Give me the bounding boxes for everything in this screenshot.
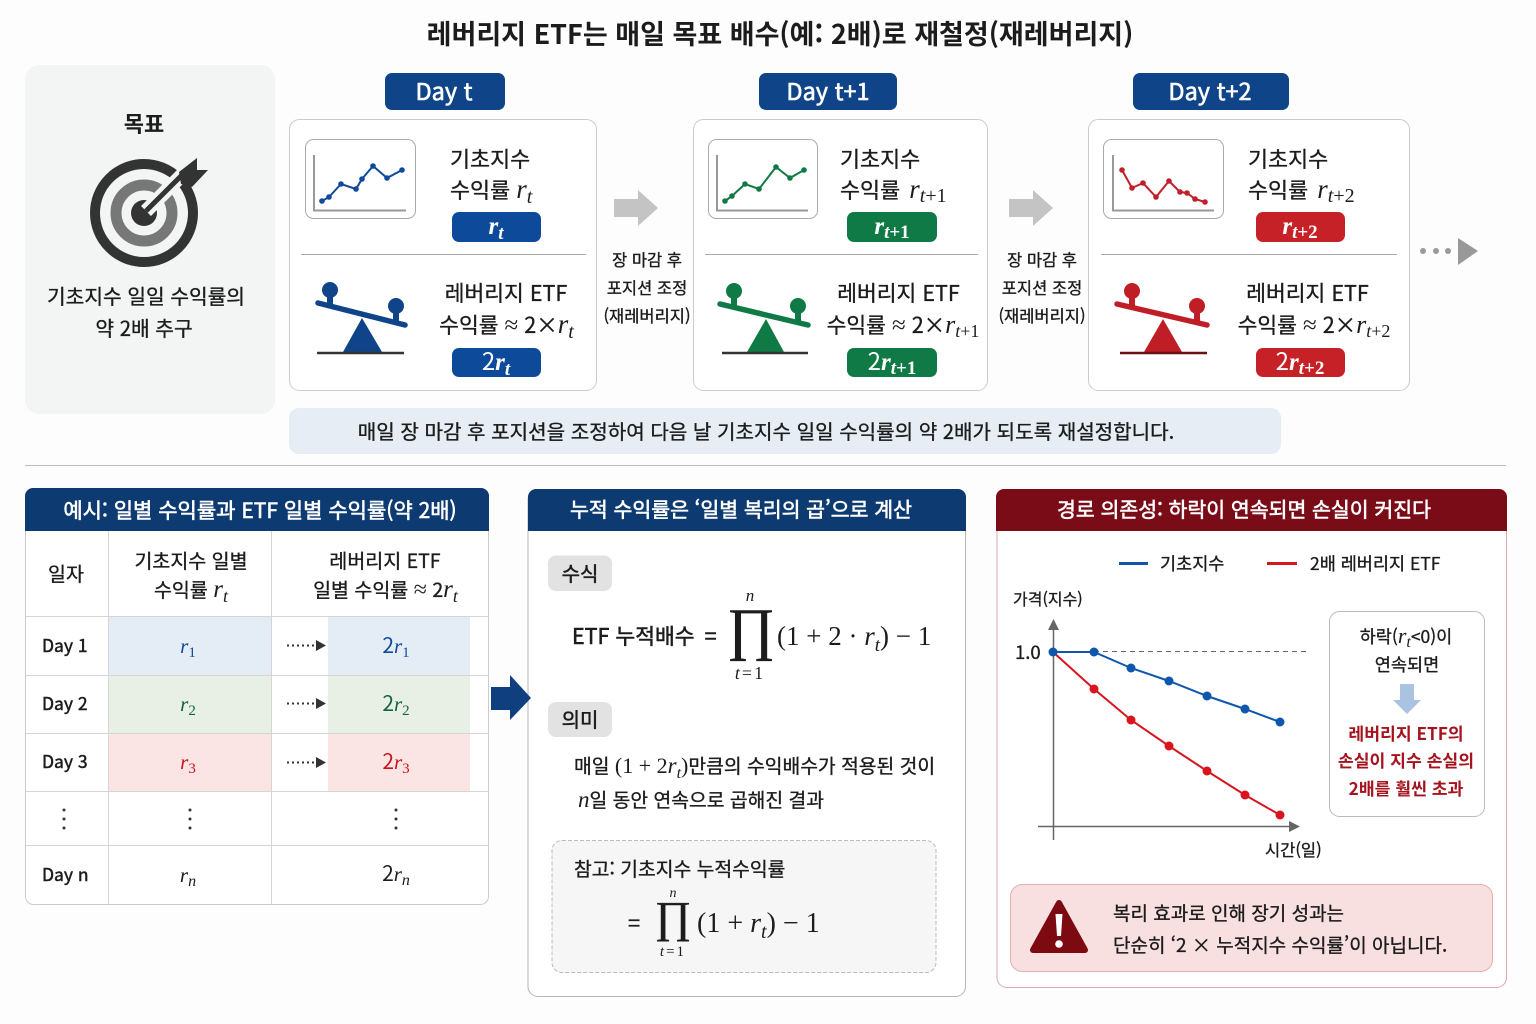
callout: consecutive declines: 레버리지 ETF의 <box>1348 720 1464 745</box>
icon: target with arrow <box>95 158 208 262</box>
leveraged ETF return label: 수익률 <box>439 309 505 340</box>
note box: t=1 <box>660 944 686 960</box>
index return label: r <box>909 174 920 204</box>
arrow: down <box>1393 684 1421 714</box>
index return label: 기초지수 <box>1248 143 1328 174</box>
note box: ) − 1 <box>767 908 820 939</box>
note box: 참고: 기초지수 누적수익률 <box>574 854 785 882</box>
pill: r_t: t <box>498 223 504 244</box>
leveraged ETF return label: 레버리지 ETF <box>445 277 567 308</box>
pill: r_t+1: +1 <box>889 222 910 243</box>
ETF cumulative formula: ETF 누적배수 = <box>572 620 717 651</box>
day label: Day t+1 <box>759 73 897 110</box>
icon: index line chart (blue) <box>306 140 416 218</box>
index return cells: 1 <box>188 645 196 661</box>
ETF cumulative formula: ) − 1 <box>880 621 931 651</box>
meaning text: 만큼의 수익배수가 적용된 것이 <box>688 751 935 779</box>
leveraged ETF return label: +1 <box>960 321 979 341</box>
rebalance label 2: 포지션 조정 <box>1002 275 1082 299</box>
meaning text: t <box>677 765 682 782</box>
icon: seesaw (blue) <box>317 282 405 353</box>
ETF cumulative formula: t=1 <box>735 663 765 683</box>
column headers: r <box>213 576 223 603</box>
leveraged ETF return label: +2 <box>1371 321 1390 341</box>
ETF cumulative formula: ∏ <box>727 596 775 662</box>
ETF return cells <box>382 630 410 889</box>
index return cells: 3 <box>188 761 196 777</box>
line chart: index vs 2x ETF: 가격(지수) <box>1013 586 1083 610</box>
pill: 2r_t+2: +2 <box>1304 358 1324 379</box>
legend: 기초지수 <box>1160 551 1224 576</box>
leveraged ETF return label: ≈ 2×r <box>1303 309 1366 340</box>
path dependence header bar <box>996 489 1507 531</box>
pill: 2r_t <box>452 342 541 380</box>
arrow: rebalance 1 <box>614 190 658 226</box>
pill: 2r_t+1: t <box>891 358 897 379</box>
vertical ellipsis marks <box>62 808 398 830</box>
pill: r_t+2: t <box>1292 222 1298 243</box>
index return label: 기초지수 <box>840 143 920 174</box>
column headers: 수익률 <box>154 574 213 603</box>
info bar <box>289 408 1281 454</box>
ETF return cells: 1 <box>402 645 410 661</box>
ETF cumulative formula: n <box>746 586 754 605</box>
note box: n <box>670 886 676 901</box>
index return label: +2 <box>1333 185 1355 207</box>
callout: consecutive declines: t <box>1406 634 1411 651</box>
ETF column header: 일별 수익률 <box>313 574 414 603</box>
ETF column header: ≈ 2r <box>414 574 453 603</box>
callout: consecutive declines: 연속되면 <box>1375 652 1439 677</box>
leveraged ETF return label: 레버리지 ETF <box>837 277 960 308</box>
arrow: table to cumulative <box>491 675 531 720</box>
warning box: 단순히 ‘2 × 누적지수 수익률’이 아닙니다. <box>1113 931 1447 958</box>
rebalance label 1: (재레버리지) <box>603 303 691 327</box>
index return cells: r <box>180 750 189 774</box>
leveraged ETF return label: ≈ 2×r <box>892 309 955 340</box>
index return label: 수익률 <box>840 174 906 205</box>
ETF cumulative formula <box>572 586 931 683</box>
pill: r_t+2: r <box>1282 213 1292 240</box>
index return label: 수익률 <box>1248 174 1314 205</box>
row labels: Day n <box>42 862 89 887</box>
meaning text: n <box>578 787 590 812</box>
rebalance label 1: 포지션 조정 <box>607 275 687 299</box>
colored row cells <box>109 617 470 791</box>
icon: index line chart (green) <box>708 140 818 218</box>
note box: (1 + r <box>697 908 761 939</box>
cumulative header bar <box>528 489 966 531</box>
pill: 2r_t+2 <box>1256 342 1345 379</box>
panel: day t+2 card <box>1088 120 1410 390</box>
panel: cumulative return <box>528 489 966 996</box>
ETF return cells: 2r <box>382 858 402 888</box>
leveraged ETF return label: 레버리지 ETF <box>1246 277 1369 308</box>
rebalance label 2: (재레버리지) <box>998 303 1086 327</box>
column headers: 기초지수 일별 <box>134 545 248 574</box>
callout: consecutive declines: 하락( <box>1360 624 1398 649</box>
arrow: rebalance 2 <box>1009 190 1053 226</box>
pill: 2r_t+1: +1 <box>896 358 916 379</box>
index return label: t <box>1328 185 1334 207</box>
pill: r_t+1: r <box>874 213 884 240</box>
rebalance label 1: 장 마감 후 <box>612 247 682 271</box>
meaning text: ) <box>681 753 688 778</box>
pill: 2r_t+1 <box>847 342 937 379</box>
icon: index line chart (red) <box>1104 140 1224 218</box>
tag: meaning: 의미 <box>562 704 598 733</box>
ETF column header: t <box>453 586 459 606</box>
index return cells: r <box>180 692 189 716</box>
tag: formula <box>548 556 612 591</box>
index return cells: 2 <box>188 703 196 719</box>
index return label: t <box>920 185 926 207</box>
panel: day t+1 card <box>694 120 988 390</box>
line chart: index vs 2x ETF <box>1013 586 1322 861</box>
leveraged ETF return label: t <box>568 321 574 343</box>
ETF return cells: 3 <box>402 761 410 777</box>
line chart: index vs 2x ETF: 시간(일) <box>1265 837 1322 861</box>
warning box: 복리 효과로 인해 장기 성과는 <box>1113 899 1344 926</box>
pill: 2r_t: 2r <box>482 342 505 377</box>
column headers: 일자 <box>48 558 84 587</box>
pill: 2r_t: t <box>505 359 511 380</box>
index return label: r <box>1317 174 1328 204</box>
day label: Day t: Day t <box>415 73 473 107</box>
pill: r_t: r <box>488 213 498 240</box>
leveraged ETF return label: ≈ 2×r <box>505 309 568 340</box>
meaning text: 매일 <box>574 751 615 779</box>
panel: example table <box>25 488 489 904</box>
rebalance label 2: 장 마감 후 <box>1007 247 1077 271</box>
icon: seesaw (green) <box>720 283 808 353</box>
row labels: Day 1 <box>42 633 88 658</box>
pill: 2r_t+2: t <box>1299 358 1305 379</box>
warning box <box>1010 884 1492 972</box>
pill: r_t+1: t <box>884 222 890 243</box>
note box: = <box>628 906 640 938</box>
day label: Day t+2: Day t+2 <box>1168 73 1252 107</box>
day label: Day t+2 <box>1133 73 1289 110</box>
icon: warning triangle <box>1033 903 1085 950</box>
legend: 2배 레버리지 ETF <box>1310 551 1441 576</box>
goal heading: 목표 <box>124 107 164 139</box>
pill: r_t+1 <box>847 212 937 243</box>
path dependence header bar: 경로 의존성: 하락이 연속되면 손실이 커진다 <box>1057 493 1431 523</box>
panel: path dependence <box>996 489 1507 988</box>
index return cells: n <box>188 873 196 890</box>
ETF return cells: 2 <box>402 703 410 719</box>
pill: 2r_t+1: 2r <box>868 342 891 377</box>
index return cells: r <box>180 863 189 887</box>
ETF return cells: 2r <box>382 688 402 718</box>
note box <box>552 840 936 972</box>
meaning text: (1 + 2r <box>615 753 677 778</box>
column headers: t <box>223 586 229 606</box>
meaning text: 일 동안 연속으로 곱해진 결과 <box>590 785 824 813</box>
dotted arrows <box>287 640 326 768</box>
ETF cumulative formula: t <box>875 635 881 656</box>
goal description: 약 2배 추구 <box>95 312 193 342</box>
leveraged ETF return label: 수익률 <box>827 309 892 340</box>
ETF return cells: n <box>402 872 410 889</box>
day label: Day t+1: Day t+1 <box>786 73 870 107</box>
index return cells <box>180 634 196 890</box>
pill: r_t+2: +2 <box>1297 222 1318 243</box>
tag: formula: 수식 <box>562 558 598 587</box>
panel: goal <box>25 65 275 414</box>
note box: t <box>761 921 767 943</box>
tag: meaning <box>548 702 612 737</box>
info bar: 매일 장 마감 후 포지션을 조정하여 다음 날 기초지수 일일 수익률의 약 2배가 되도록 재설정합니다. <box>358 416 1174 445</box>
title: 레버리지 ETF는 매일 목표 배수(예: 2배)로 재철정(재레버리지) <box>427 13 1133 52</box>
table header bar <box>25 488 489 531</box>
ETF column header: 레버리지 ETF <box>329 545 441 574</box>
note box: ∏ <box>655 893 691 942</box>
goal description: 기초지수 일일 수익률의 <box>47 280 245 310</box>
index return label: 수익률 <box>450 174 516 205</box>
row labels: Day 2 <box>42 691 88 716</box>
index return label: t <box>527 186 533 208</box>
ETF return cells: 2r <box>382 746 402 776</box>
legend <box>1119 551 1441 576</box>
callout: consecutive declines: 손실이 지수 손실의 <box>1338 747 1474 772</box>
index return label: r <box>516 174 527 204</box>
leveraged ETF return label: t <box>1366 321 1372 341</box>
callout: consecutive declines <box>1330 612 1484 816</box>
pill: r_t <box>452 212 541 244</box>
pill: 2r_t+2: 2r <box>1276 342 1299 377</box>
panel: day t card <box>290 120 596 390</box>
callout: consecutive declines: 2배를 훨씬 초과 <box>1349 775 1464 800</box>
icon: seesaw (red) <box>1117 283 1207 353</box>
callout: consecutive declines: r <box>1398 623 1407 648</box>
cumulative header bar: 누적 수익률은 ‘일별 복리의 곱’으로 계산 <box>570 493 912 523</box>
index return cells: r <box>180 634 189 658</box>
table header bar: 예시: 일별 수익률과 ETF 일별 수익률(약 2배) <box>63 495 457 525</box>
pill: r_t+2 <box>1256 212 1345 243</box>
line chart: index vs 2x ETF: 1.0 <box>1015 639 1041 665</box>
ETF return cells: 2r <box>382 630 402 660</box>
index return label: 기초지수 <box>450 143 530 174</box>
leveraged ETF return label: t <box>955 321 961 341</box>
arrow: continuation dots <box>1420 238 1478 265</box>
ETF cumulative formula: (1 + 2 · r <box>777 621 875 651</box>
callout: consecutive declines: <0)이 <box>1411 624 1452 649</box>
day label: Day t <box>385 73 505 110</box>
leveraged ETF return label: 수익률 <box>1238 309 1303 340</box>
index return label: +1 <box>925 185 947 207</box>
row labels: Day 3 <box>42 749 88 774</box>
